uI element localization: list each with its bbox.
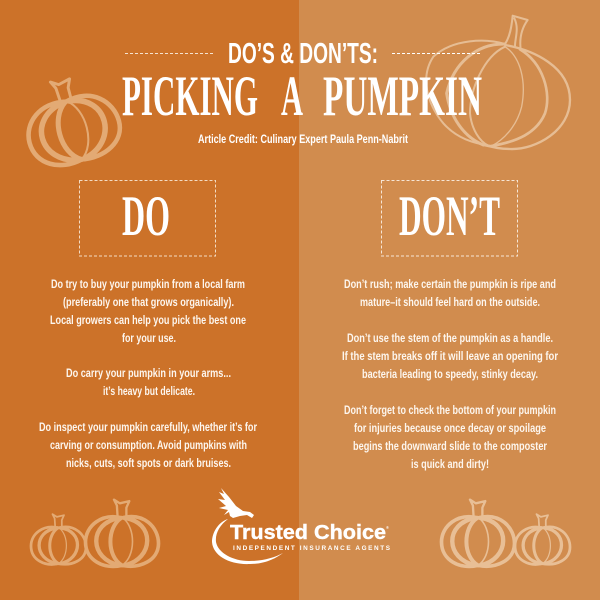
title bbox=[122, 65, 482, 128]
text block: don't tips: If the stem breaks off it will leave an opening for bbox=[342, 350, 558, 363]
panel: don't background bbox=[299, 0, 600, 600]
icon: small pumpkin bottom right bbox=[515, 514, 570, 564]
text block: do tips: carving or consumption. Avoid pumpkins with bbox=[50, 439, 247, 452]
panel: don't heading box: DON’T bbox=[399, 185, 500, 248]
panel: don't heading box bbox=[382, 180, 518, 256]
logo wordmark: Trusted Choice bbox=[230, 522, 386, 544]
text block: don't tips: is quick and dirty! bbox=[411, 458, 489, 471]
title: PUMPKIN bbox=[323, 65, 482, 128]
icon: swoosh bbox=[212, 519, 283, 564]
text block: do tips: Do inspect your pumpkin carefully, whether it’s for bbox=[39, 421, 257, 434]
divider left of heading bbox=[125, 52, 214, 54]
text block: don't tips: bacteria leading to speedy, stinky decay. bbox=[362, 368, 538, 381]
icon: pumpkin top left bbox=[16, 68, 126, 173]
logo: trusted choice bbox=[212, 488, 391, 564]
icon: eagle bbox=[218, 488, 254, 518]
text block: don't tips bbox=[342, 278, 558, 471]
text block: do tips: Do carry your pumpkin in your arms... bbox=[66, 367, 231, 380]
text block: do tips bbox=[39, 278, 257, 470]
text block: do tips: for your use. bbox=[122, 332, 176, 345]
heading: do's and don'ts: DO’S & DON’TS: bbox=[228, 38, 378, 70]
text block: don't tips: for injuries because once decay or spoilage bbox=[354, 422, 546, 435]
text block: do tips: (preferably one that grows organically). bbox=[63, 296, 234, 309]
text block: don't tips: begins the downward slide to the composter bbox=[353, 440, 547, 453]
icon: large pumpkin bottom right bbox=[442, 500, 514, 566]
article credit: Article Credit: Culinary Expert Paula Penn-Nabrit bbox=[198, 134, 408, 146]
title: PICKING bbox=[122, 65, 258, 128]
text block: do tips: Do try to buy your pumpkin from a local farm bbox=[51, 278, 245, 291]
icon: small pumpkin bottom left bbox=[31, 514, 86, 564]
divider right of heading bbox=[392, 52, 480, 54]
panel: do heading box bbox=[80, 180, 216, 256]
text block: do tips: nicks, cuts, soft spots or dark bruises. bbox=[66, 457, 231, 470]
icon: large pumpkin top right bbox=[426, 16, 570, 149]
title: A bbox=[281, 65, 303, 128]
text block: do tips: Local growers can help you pick the best one bbox=[50, 314, 246, 327]
text block: do tips: it’s heavy but delicate. bbox=[103, 385, 195, 398]
text block: don't tips: Don’t use the stem of the pumpkin as a handle. bbox=[347, 332, 553, 345]
registered mark: ® bbox=[386, 525, 389, 530]
panel: do heading box: DO bbox=[122, 185, 170, 248]
text block: don't tips: mature–it should feel hard on the outside. bbox=[360, 296, 540, 309]
panel: do background bbox=[0, 0, 299, 600]
icon: large pumpkin bottom left bbox=[86, 500, 158, 566]
logo tagline: INDEPENDENT INSURANCE AGENTS bbox=[233, 545, 391, 552]
